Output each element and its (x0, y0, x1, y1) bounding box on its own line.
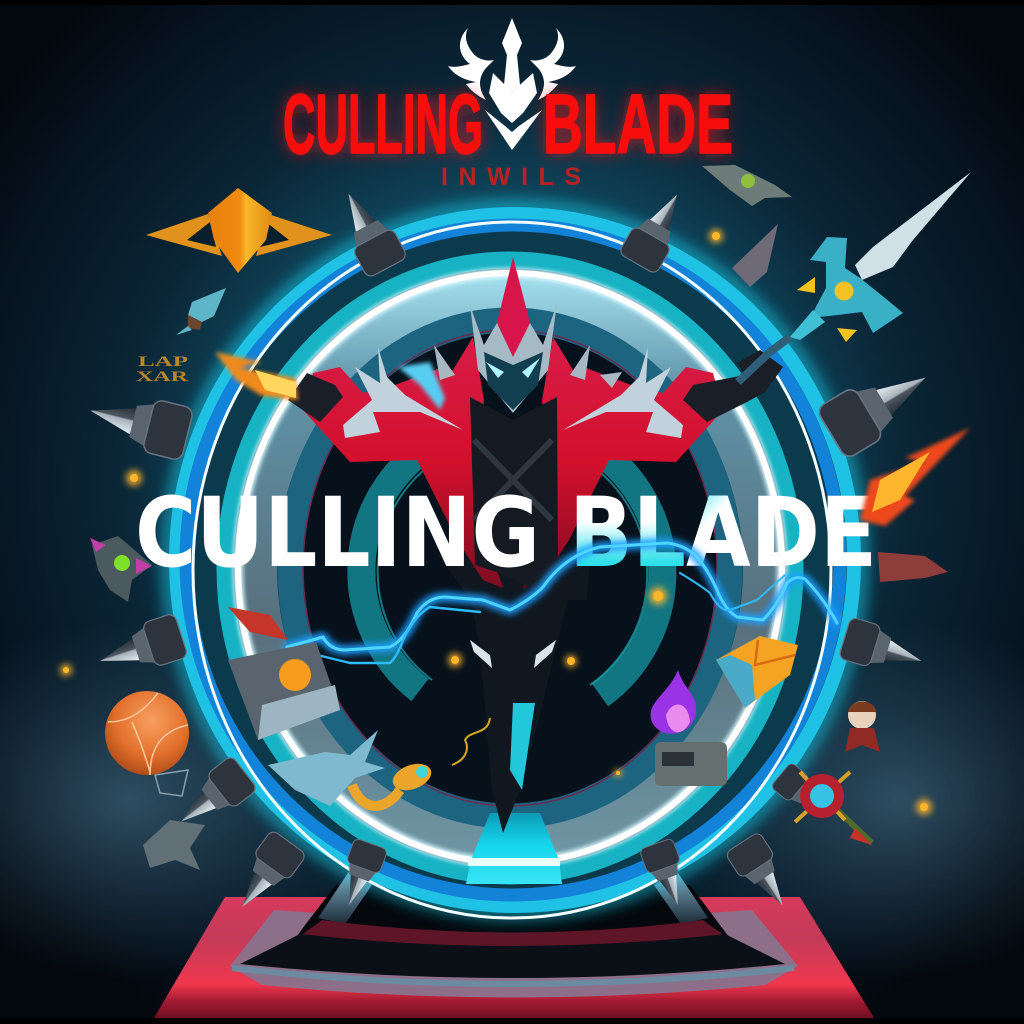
torso (470, 397, 558, 592)
icon: comet fire (860, 428, 970, 526)
small gold label: XAR (136, 369, 188, 385)
icon: metal gauntlet (268, 730, 385, 806)
icon: small dagger (176, 288, 226, 335)
top logo emblem (448, 18, 576, 150)
coat right (523, 337, 723, 588)
red logo text: CULLING (283, 77, 483, 171)
icon: small missile (878, 552, 948, 582)
gloves (288, 373, 343, 422)
helmet (470, 303, 557, 413)
icon: red crystal shard (732, 224, 778, 287)
pedestal (154, 870, 874, 1018)
icon: round gem staff (795, 772, 872, 845)
icon: yellow claw cannon (352, 759, 435, 806)
lightning (287, 543, 837, 663)
red logo text: CULLING (283, 77, 483, 171)
small gold label (136, 354, 188, 385)
icon: chibi character (845, 701, 880, 752)
hero figure (288, 257, 783, 833)
coat left (303, 337, 503, 588)
icon: purple flame device (651, 670, 727, 786)
icon: flying craft (702, 165, 792, 206)
side spikes (434, 345, 590, 380)
glowing sparks (60, 229, 932, 815)
icon: great sword and mace (738, 172, 971, 382)
shoulder blades (343, 347, 463, 438)
icon: muzzle flame (215, 352, 298, 400)
ring spikes (84, 183, 941, 919)
energy glow (398, 362, 445, 410)
icon: crouching figure (143, 820, 205, 870)
glowing ring frame (170, 208, 860, 918)
icon: forge machine (228, 607, 340, 740)
icon: purple gear gadget (90, 536, 152, 602)
icon: orange and blue shield gem (716, 636, 798, 708)
legs (438, 555, 590, 833)
subtitle: INWILS (441, 163, 581, 191)
main title: CULLING BLADE (135, 477, 877, 589)
small gold label: LAP (138, 354, 188, 370)
icon: golden winged emblem (146, 188, 332, 273)
red logo text: BLADE (543, 77, 733, 171)
light beam (466, 813, 562, 884)
icon: orange sphere (105, 691, 189, 796)
icon: yellow wire (452, 718, 490, 765)
red logo text: BLADE (543, 77, 733, 171)
